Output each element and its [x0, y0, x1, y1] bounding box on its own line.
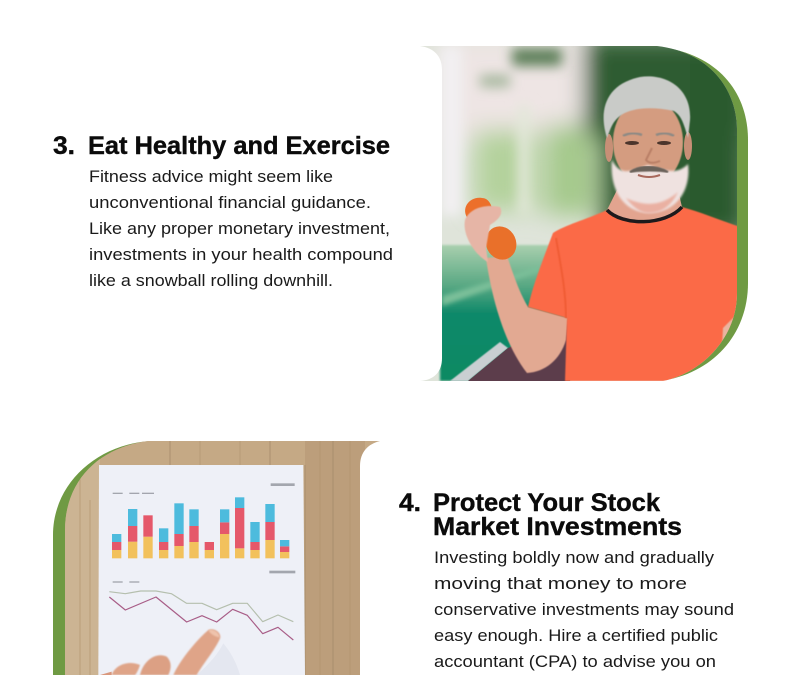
- photo: wood table: [60, 441, 380, 675]
- dumbbell: [465, 198, 516, 260]
- text block: tip 4 body: [434, 548, 734, 671]
- beard: [612, 160, 688, 213]
- text block: tip 4 body: easy enough. Hire a certified public: [434, 626, 719, 645]
- text block: tip 3 body: Like any proper monetary investment,: [89, 219, 390, 238]
- text block: tip 3 body: Fitness advice might seem like: [89, 167, 333, 186]
- green frame: [640, 46, 748, 381]
- white notch: [360, 441, 400, 675]
- hand: [465, 206, 501, 262]
- moustache and mouth: [630, 167, 668, 172]
- text block: tip 3 body: [89, 167, 393, 290]
- neck and collar: [607, 190, 682, 221]
- line chart: [109, 591, 293, 640]
- face: [612, 108, 684, 173]
- eyes and nose: [623, 133, 674, 163]
- text block: tip 4 body: moving that money to more: [434, 574, 687, 593]
- text block: tip 4 body: conservative investments may sound: [434, 600, 734, 619]
- text block: tip 3 body: investments in your health compound: [89, 245, 393, 264]
- heading: tip 4: 4.: [399, 489, 421, 517]
- arm: [486, 256, 568, 373]
- text block: tip 4 body: accountant (CPA) to advise you on: [434, 652, 716, 671]
- white notch: [400, 40, 442, 390]
- shirt: [528, 207, 740, 381]
- panel: tip 3 text: [53, 132, 393, 290]
- panel: tip 4 text: [399, 489, 734, 671]
- green frame: [53, 441, 150, 675]
- heading: tip 3: Eat Healthy and Exercise: [88, 132, 390, 160]
- text block: tip 3 body: like a snowball rolling downhill.: [89, 271, 333, 290]
- hand pointing: [100, 629, 240, 675]
- photo: man with dumbbell: [420, 46, 737, 381]
- heading: tip 4: Protect Your Stock: [433, 489, 660, 517]
- heading: tip 4: Market Investments: [433, 513, 682, 541]
- paper with charts: [98, 465, 305, 675]
- text block: tip 3 body: unconventional financial guidance.: [89, 193, 371, 212]
- panel: stock chart photo: [53, 441, 400, 675]
- hair: [604, 76, 690, 138]
- running track: [440, 245, 570, 381]
- heading: tip 4: [399, 489, 682, 541]
- panel: exercising man photo: [420, 46, 748, 381]
- heading: tip 3: 3.: [53, 132, 75, 160]
- text block: tip 4 body: Investing boldly now and gradually: [434, 548, 715, 567]
- bar chart: [112, 483, 295, 583]
